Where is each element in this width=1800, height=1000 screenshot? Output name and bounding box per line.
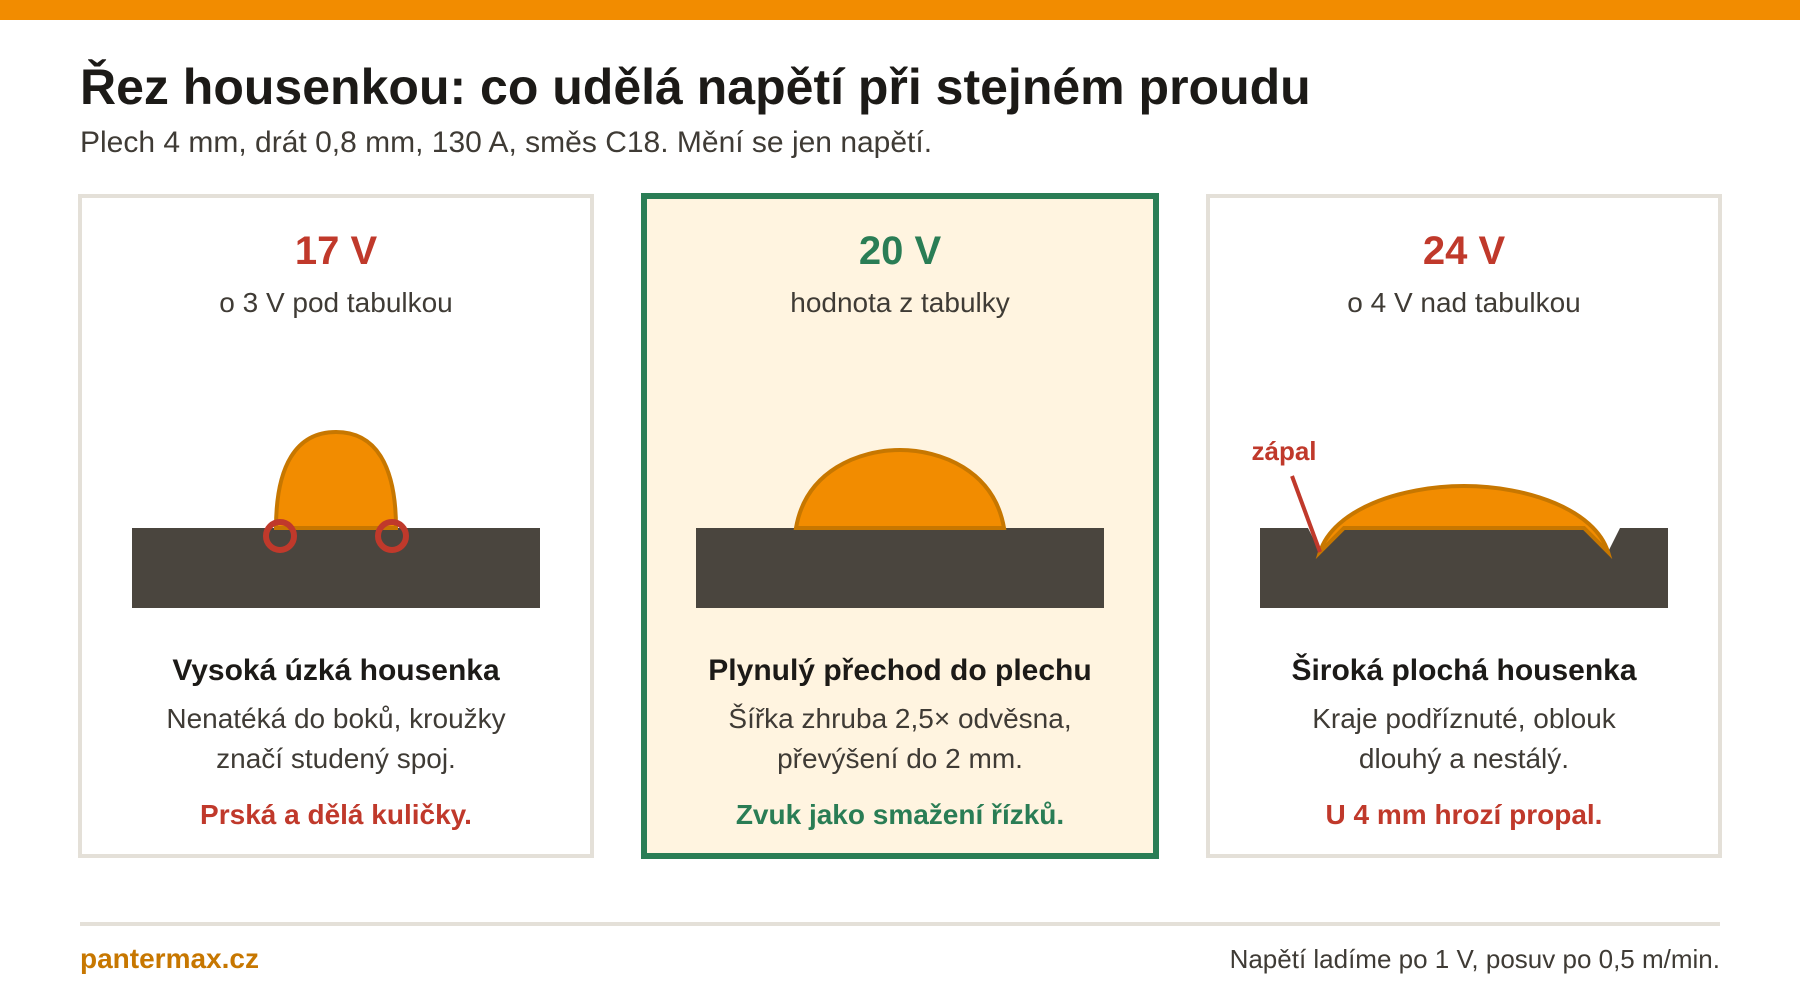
description: Nenatéká do boků, kroužky: [166, 703, 506, 734]
description: [728, 703, 1072, 774]
card heading: Plynulý přechod do plechu: [708, 654, 1092, 687]
steel plate: [132, 528, 540, 608]
panel: 20 V highlighted: [641, 193, 1159, 859]
description: značí studený spoj.: [216, 743, 456, 774]
description: dlouhý a nestálý.: [1359, 743, 1569, 774]
title: Řez housenkou: co udělá napětí při stejném proudu: [80, 59, 1311, 115]
footer note: Napětí ladíme po 1 V, posuv po 0,5 m/min.: [1230, 944, 1720, 974]
cold joint ring right: [378, 522, 406, 550]
weld bead: [276, 432, 396, 528]
cold joint ring left: [266, 522, 294, 550]
description: Šířka zhruba 2,5× odvěsna,: [728, 703, 1072, 734]
undercut callout line: [1292, 476, 1320, 552]
voltage note: o 4 V nad tabulkou: [1347, 287, 1581, 318]
description: [166, 703, 506, 774]
subtitle: Plech 4 mm, drát 0,8 mm, 130 A, směs C18. Mění se jen napětí.: [80, 126, 932, 159]
card heading: Vysoká úzká housenka: [172, 654, 500, 687]
footer brand: pantermax.cz: [80, 943, 259, 974]
description: [1312, 703, 1616, 774]
panel: 17 V: [78, 194, 594, 858]
voltage note: o 3 V pod tabulkou: [219, 287, 453, 318]
description: převýšení do 2 mm.: [777, 743, 1023, 774]
voltage note: hodnota z tabulky: [790, 287, 1010, 318]
voltage 20 V: 20 V: [859, 229, 941, 273]
top accent bar: [0, 0, 1800, 20]
verdict: Zvuk jako smažení řízků.: [736, 799, 1064, 830]
undercut label: zápal: [1252, 436, 1317, 466]
weld bead: [1320, 486, 1608, 552]
verdict: U 4 mm hrozí propal.: [1326, 799, 1602, 830]
voltage 24 V: 24 V: [1423, 229, 1505, 273]
weld bead: [796, 450, 1004, 528]
verdict: Prská a dělá kuličky.: [200, 799, 472, 830]
card heading: Široká plochá housenka: [1291, 654, 1637, 687]
steel plate with notches: [1260, 528, 1668, 608]
voltage 17 V: 17 V: [295, 229, 377, 273]
description: Kraje podříznuté, oblouk: [1312, 703, 1616, 734]
diagram: narrow tall bead: [132, 430, 540, 608]
steel plate: [696, 528, 1104, 608]
diagram: wide flat bead with undercut: [1252, 436, 1668, 608]
panel: 24 V: [1206, 194, 1722, 858]
diagram: smooth bead: [696, 448, 1104, 608]
